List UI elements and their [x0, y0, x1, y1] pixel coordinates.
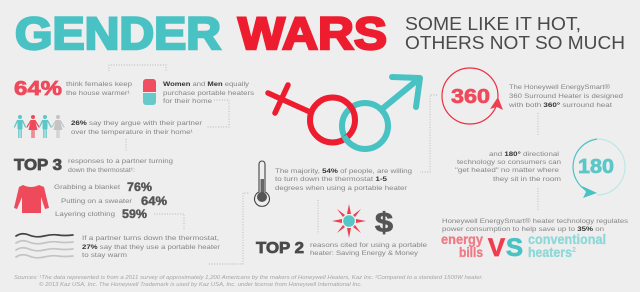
heading: top 3: responses to a partner turning	[68, 158, 173, 165]
text: women and men	[163, 81, 255, 105]
text: 27 percent portable heater: to stay warm	[82, 252, 128, 259]
text: women and men: Women and Men equally	[163, 81, 250, 88]
icon: red arrowhead	[490, 97, 503, 110]
text: majority 54 percent: The majority, 54% of people, are willing	[275, 168, 412, 175]
callout: 360 heat	[442, 68, 503, 124]
text: 360 surround	[508, 83, 623, 109]
icon: heater pill	[143, 79, 156, 105]
text: majority 54 percent: to turn down the thermostat 1-5	[275, 176, 387, 183]
comparison: energy bills vs conventional heaters: S	[506, 234, 523, 262]
list: three responses	[54, 182, 167, 221]
text: energy savings	[442, 217, 629, 233]
comparison: energy bills vs conventional heaters: heaters	[528, 245, 572, 260]
heading: top 2: TOP 2	[256, 240, 304, 257]
text: majority 54 percent	[275, 168, 412, 192]
text: 27 percent portable heater: If a partner turns down the thermostat,	[82, 235, 219, 242]
icon: gender symbols	[268, 77, 420, 149]
text: 180 directional: "get heated" no matter where	[455, 167, 559, 174]
text: women and men: for their home	[163, 98, 212, 105]
stat: 64 percent	[14, 78, 132, 100]
text: 26 percent argue: over the temperature in their home¹	[71, 129, 194, 136]
callout: 360 heat: 360	[451, 86, 490, 108]
footer: sources: Sources: ¹The data represented is from a 2011 survey of approximately 1,200 Americans by the makers of Honeywell Heaters, Kaz Inc. ²Compared to a standard 1500W heater.	[14, 275, 483, 281]
list: three responses: 64%	[141, 196, 167, 208]
stat: 64 percent: 64%	[14, 78, 62, 100]
heading: top 3: down the thermostat¹:	[68, 167, 135, 174]
stat: 64 percent: the house warmer¹	[66, 90, 131, 97]
list: three responses: 59%	[122, 209, 147, 221]
comparison: energy bills vs conventional heaters	[441, 232, 606, 262]
list: three responses: Putting on a sweater	[61, 198, 133, 205]
text: 180 directional: and 180° directional	[489, 150, 560, 158]
subtitle: SOME LIKE IT HOT,	[405, 13, 581, 34]
text: 27 percent portable heater	[82, 235, 221, 259]
title: Gender Wars: GENDER	[15, 8, 221, 59]
comparison: energy bills vs conventional heaters: V	[488, 234, 505, 262]
comparison: energy bills vs conventional heaters: conventional	[528, 232, 606, 247]
icon: sun	[332, 204, 366, 238]
text: 360 surround: with both 360° surround heat	[508, 101, 612, 109]
list: three responses: Grabbing a blanket	[54, 184, 120, 191]
text: energy savings: Honeywell EnergySmart® heater technology regulates	[442, 217, 629, 225]
heading: top 2: heater: Saving Energy & Money	[310, 250, 419, 257]
stat: 64 percent: think females keep	[66, 81, 132, 88]
callout: 180 heat: 180	[578, 156, 614, 178]
heading: top 3	[14, 157, 173, 174]
callout: 180 heat	[573, 139, 625, 198]
text: 180 directional: technology so consumers can	[457, 159, 561, 166]
icon: teal arrowhead	[582, 186, 597, 198]
icon: sweater	[14, 185, 49, 213]
comparison: energy bills vs conventional heaters: 2	[572, 247, 576, 254]
list: three responses: 76%	[127, 182, 152, 194]
text: energy savings: power consumption to help save up to 35% on	[442, 226, 604, 233]
text: 26 percent argue: 26% say they argue with their partner	[71, 120, 203, 127]
comparison: energy bills vs conventional heaters: bills	[459, 245, 483, 260]
text: women and men: purchase portable heaters	[163, 90, 255, 97]
text: 26 percent argue	[71, 120, 203, 136]
icon: dollar sign: $	[375, 207, 393, 238]
title: Gender Wars: WARS	[238, 8, 387, 59]
heading: top 3: TOP 3	[14, 157, 62, 174]
comparison: energy bills vs conventional heaters: energy	[441, 232, 483, 247]
heading: top 2	[256, 240, 427, 257]
text: 27 percent portable heater: 27% say that they use a portable heater	[82, 244, 221, 251]
icon: heat waves	[16, 234, 73, 258]
subtitle: OTHERS NOT SO MUCH	[405, 32, 625, 53]
footer: sources	[14, 275, 483, 288]
subtitle	[405, 13, 625, 53]
text: 180 directional	[455, 150, 562, 183]
text: 360 surround: The Honeywell EnergySmart®	[509, 83, 610, 91]
text: majority 54 percent: degrees when using a portable heater	[275, 185, 408, 192]
footer: sources: © 2013 Kaz USA, Inc. The Honeywell Trademark is used by Kaz USA, Inc. under license from Honeywell International Inc.	[39, 281, 362, 288]
text: 360 surround: 360 Surround Heater is designed	[509, 93, 623, 100]
heading: top 2: reasons cited for using a portable	[310, 242, 427, 249]
title: Gender Wars	[15, 8, 387, 59]
text: 180 directional: they sit in the room	[493, 176, 562, 183]
icon: four people	[14, 115, 64, 138]
icon: thermometer	[255, 161, 270, 206]
list: three responses: Layering clothing	[55, 211, 115, 218]
